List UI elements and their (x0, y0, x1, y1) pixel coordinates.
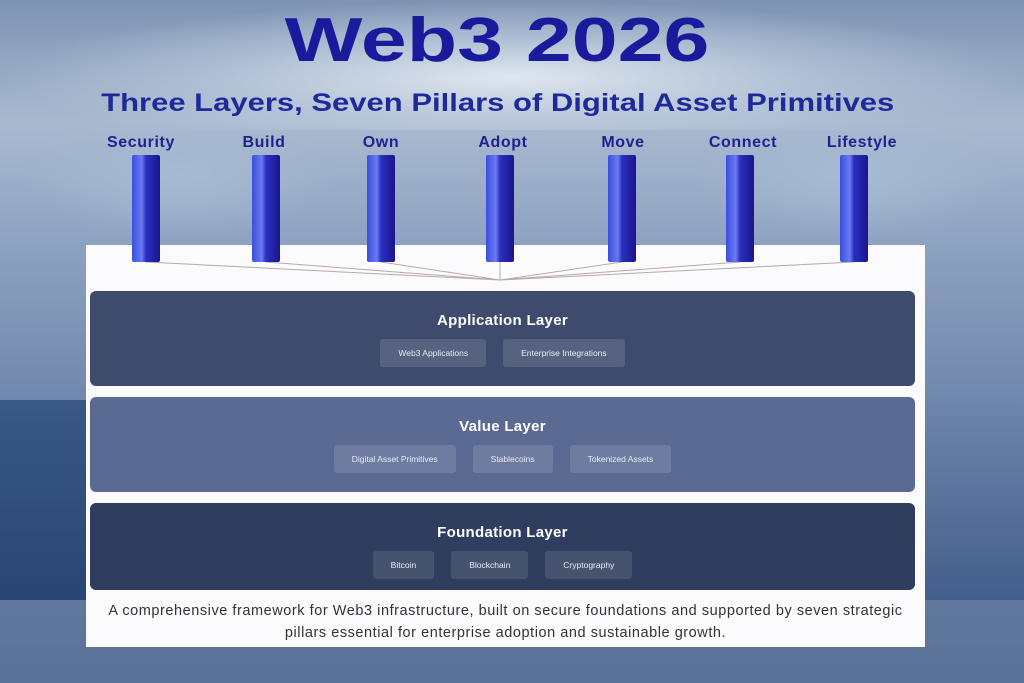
application layer (90, 291, 915, 386)
pillar labels (107, 134, 897, 151)
value layer: Stablecoins (491, 454, 535, 464)
foundation layer: Cryptography (563, 560, 614, 570)
subtitle: Three Layers, Seven Pillars of Digital Asset Primitives (101, 89, 894, 117)
main white panel (86, 245, 925, 647)
pillar columns (132, 155, 868, 262)
foundation layer (90, 503, 915, 590)
value layer: Value Layer (459, 418, 546, 435)
foundation layer: Blockchain (469, 560, 510, 570)
application layer: Enterprise Integrations (521, 348, 607, 358)
caption: A comprehensive framework for Web3 infrastructure, built on secure foundations and supported by seven strategic (108, 603, 903, 619)
pillar labels: Adopt (478, 134, 528, 151)
foundation layer: Foundation Layer (437, 524, 568, 541)
value layer: Digital Asset Primitives (352, 454, 438, 464)
value layer: Tokenized Assets (588, 454, 653, 464)
title: Web3 2026 (285, 6, 709, 75)
application layer: Application Layer (437, 312, 568, 329)
pillar labels: Connect (709, 134, 777, 151)
value layer (90, 397, 915, 492)
pillar labels: Security (107, 134, 175, 151)
pillar labels: Own (363, 134, 399, 151)
caption (108, 603, 903, 641)
pillar labels: Build (242, 134, 286, 151)
caption: pillars essential for enterprise adoption and sustainable growth. (285, 625, 726, 641)
pillar labels: Lifestyle (827, 134, 897, 151)
application layer: Web3 Applications (398, 348, 468, 358)
pillar labels: Move (601, 134, 645, 151)
pillars (107, 134, 897, 262)
foundation layer: Bitcoin (391, 560, 416, 570)
